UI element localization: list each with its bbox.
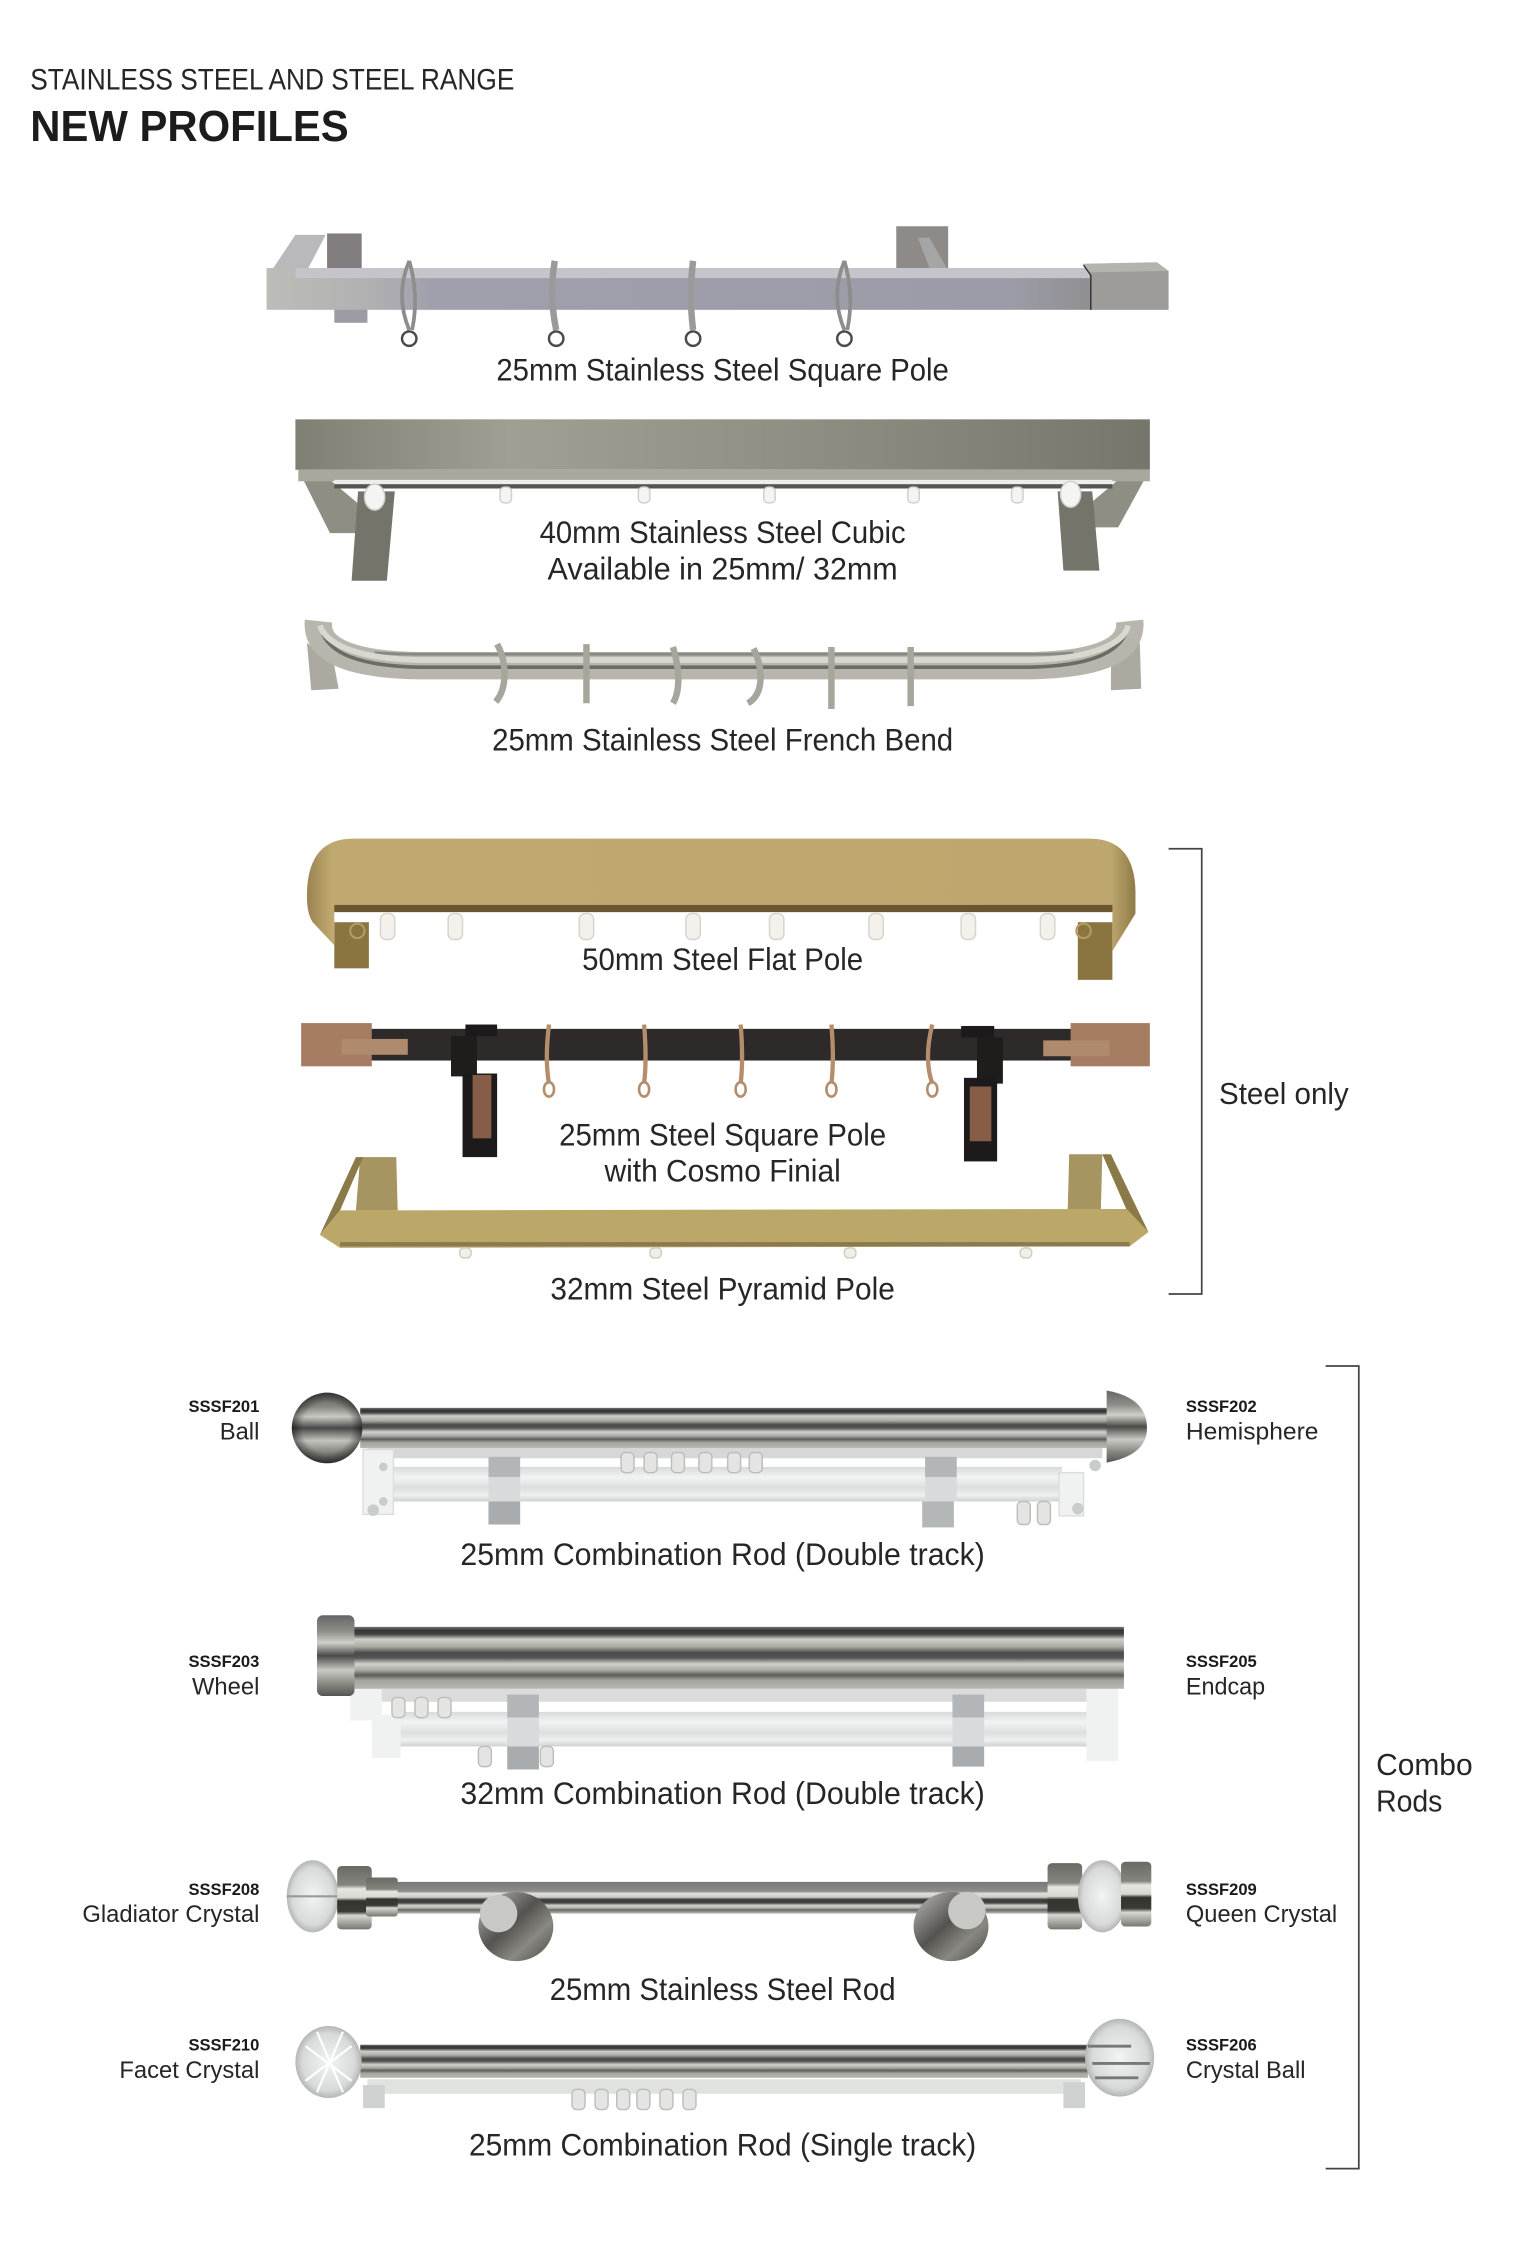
caption: single track: 25mm Combination Rod (Single track): [469, 2127, 976, 2163]
label: SSSF205 endcap: [1186, 1652, 1265, 1701]
label: SSSF205 endcap: SSSF205: [1186, 1652, 1257, 1671]
product: 50mm steel flat pole: [307, 839, 1135, 980]
product: 25mm combination rod double track: [292, 1391, 1147, 1527]
label: SSSF205 endcap: Endcap: [1186, 1674, 1265, 1701]
label: combo rods: Combo: [1376, 1747, 1473, 1782]
caption: cosmo finial: [559, 1117, 886, 1189]
label: SSSF202 hemisphere: [1186, 1397, 1318, 1446]
label: SSSF202 hemisphere: Hemisphere: [1186, 1419, 1318, 1446]
label: SSSF201 ball: Ball: [220, 1419, 259, 1446]
label: SSSF210 facet crystal: SSSF210: [188, 2035, 259, 2054]
label: SSSF209 queen crystal: [1186, 1880, 1337, 1928]
label: SSSF202 hemisphere: SSSF202: [1186, 1397, 1257, 1416]
label: SSSF206 crystal ball: [1186, 2035, 1305, 2084]
label: SSSF210 facet crystal: [119, 2035, 259, 2084]
product: 25mm stainless steel square pole: [267, 226, 1169, 346]
caption: 32mm double track: 32mm Combination Rod (Double track): [460, 1775, 985, 1811]
caption: square pole: 25mm Stainless Steel Square Pole: [496, 351, 949, 387]
label: combo rods: [1376, 1747, 1473, 1818]
caption: cosmo finial: with Cosmo Finial: [604, 1153, 841, 1189]
product: 32mm combination rod double track: [317, 1615, 1124, 1769]
label: SSSF201 ball: SSSF201: [188, 1397, 259, 1416]
label: SSSF203 wheel: SSSF203: [188, 1652, 259, 1671]
label: SSSF210 facet crystal: Facet Crystal: [119, 2057, 259, 2084]
label: steel only: Steel only: [1219, 1076, 1349, 1111]
caption: flat pole: 50mm Steel Flat Pole: [582, 941, 863, 977]
product: 25mm stainless steel rod: [287, 1860, 1151, 1961]
caption: cubic: Available in 25mm/ 32mm: [548, 550, 898, 586]
label: SSSF201 ball: [188, 1397, 259, 1446]
product: 25mm stainless steel french bend: [307, 621, 1141, 709]
caption: cubic: 40mm Stainless Steel Cubic: [540, 514, 906, 550]
main title: NEW PROFILES: [30, 103, 349, 151]
subtitle: STAINLESS STEEL AND STEEL RANGE: [30, 63, 514, 96]
product: 32mm steel pyramid pole: [320, 1154, 1148, 1258]
label: combo rods: Rods: [1376, 1783, 1442, 1818]
label: SSSF209 queen crystal: SSSF209: [1186, 1880, 1257, 1899]
bracket: combo rods: [1326, 1366, 1359, 2169]
product: 25mm steel square pole with cosmo finial: [301, 1023, 1150, 1161]
label: SSSF206 crystal ball: SSSF206: [1186, 2035, 1257, 2054]
caption: cubic: [540, 514, 906, 586]
title block: [30, 63, 514, 151]
label: SSSF209 queen crystal: Queen Crystal: [1186, 1901, 1337, 1928]
label: SSSF208 gladiator crystal: Gladiator Crystal: [82, 1901, 259, 1928]
caption: stainless steel rod: 25mm Stainless Steel Rod: [550, 1971, 896, 2007]
label: SSSF206 crystal ball: Crystal Ball: [1186, 2057, 1305, 2084]
caption: french bend: 25mm Stainless Steel French Bend: [492, 722, 953, 758]
label: SSSF203 wheel: [188, 1652, 259, 1701]
product: 40mm stainless steel cubic: [295, 419, 1150, 581]
caption: cosmo finial: 25mm Steel Square Pole: [559, 1117, 886, 1153]
label: SSSF208 gladiator crystal: [82, 1880, 259, 1928]
label: SSSF203 wheel: Wheel: [192, 1674, 259, 1701]
caption: 25mm double track: 25mm Combination Rod (Double track): [460, 1536, 985, 1572]
label: SSSF208 gladiator crystal: SSSF208: [188, 1880, 259, 1899]
bracket: steel only: [1169, 849, 1202, 1294]
product: 25mm combination rod single track: [295, 2019, 1154, 2110]
caption: pyramid pole: 32mm Steel Pyramid Pole: [550, 1271, 895, 1307]
